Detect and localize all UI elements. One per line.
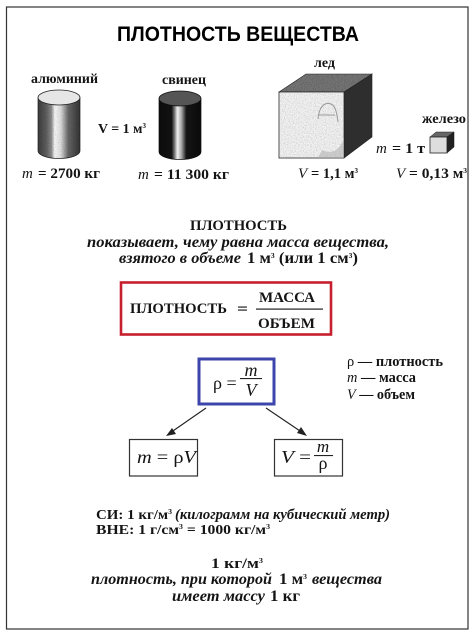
units text: 3 xyxy=(168,508,173,516)
callout: volume formula xyxy=(274,437,342,476)
panel: iron cube: V xyxy=(396,166,407,182)
volume label: 3 xyxy=(143,122,146,130)
legend: V — объем xyxy=(347,387,415,403)
callout: density formula: V xyxy=(246,380,258,400)
unit definition text: вещества xyxy=(312,571,382,588)
volume label: V = 1 м xyxy=(98,122,143,137)
definition text: 1 м xyxy=(247,250,269,267)
definition text: 3 xyxy=(271,252,275,260)
callout: word formula: ОБЪЕМ xyxy=(258,316,315,332)
arrow: to volume formula xyxy=(266,408,307,436)
panel: iron cube: = 1 т xyxy=(392,141,425,157)
panel: ice cube xyxy=(279,56,372,182)
callout: word formula: ПЛОТНОСТЬ xyxy=(130,301,227,317)
panel: aluminium cylinder: = 2700 кг xyxy=(38,166,100,182)
definition text: 3 xyxy=(349,252,353,260)
callout: volume formula: ρ xyxy=(319,453,328,473)
panel: ice cube: лед xyxy=(314,56,335,71)
definition text: показывает, чему равна масса вещества, xyxy=(87,234,389,251)
panel: iron cube xyxy=(376,112,468,182)
callout: mass formula xyxy=(130,440,198,476)
arrow: to mass formula xyxy=(166,408,206,436)
units text: = 1000 кг/м xyxy=(183,523,267,538)
unit definition text: плотность, при которой xyxy=(91,571,272,588)
panel: aluminium cylinder xyxy=(22,72,100,182)
callout: word formula: = xyxy=(237,301,248,318)
definition text: ПЛОТНОСТЬ xyxy=(190,218,287,234)
callout: density formula xyxy=(199,359,274,404)
unit definition text: имеет массу xyxy=(172,588,265,605)
unit definition text: 1 м xyxy=(279,571,301,588)
units text: 3 xyxy=(266,523,271,531)
unit definition text: 3 xyxy=(259,557,264,565)
panel: lead cylinder xyxy=(138,73,229,183)
units text: (килограмм на кубический метр) xyxy=(175,507,390,523)
legend xyxy=(347,354,443,403)
legend: ρ — плотность xyxy=(347,354,443,370)
unit definition text: 1 кг xyxy=(270,588,300,605)
panel: lead cylinder: = 11 300 кг xyxy=(154,167,229,183)
units text: СИ: 1 кг/м xyxy=(96,507,161,522)
callout: volume formula: m xyxy=(317,437,329,456)
legend: m — масса xyxy=(347,370,417,386)
panel: lead cylinder: m xyxy=(138,167,149,183)
panel: iron cube: m xyxy=(376,141,387,157)
definition text: взятого в объеме xyxy=(119,250,241,267)
definition text: (или 1 см xyxy=(275,250,349,267)
panel: iron cube: = 0,13 м xyxy=(409,166,460,182)
panel: ice cube: = 1,1 м xyxy=(311,166,355,182)
callout: mass formula: m = ρV xyxy=(137,447,198,467)
units text: 3 xyxy=(179,523,184,531)
title: ПЛОТНОСТЬ ВЕЩЕСТВА xyxy=(117,23,359,46)
definition text: ) xyxy=(352,250,358,267)
unit definition text: 1 кг/м xyxy=(211,556,252,572)
units text: ВНЕ: 1 г/см xyxy=(96,523,170,538)
units text xyxy=(96,507,390,538)
callout: volume formula: V = xyxy=(281,447,311,467)
unit definition text xyxy=(91,556,382,605)
panel: iron cube: 3 xyxy=(463,167,468,175)
callout: density formula: m xyxy=(244,360,258,380)
panel: iron cube: железо xyxy=(422,112,466,127)
panel: lead cylinder: свинец xyxy=(162,73,206,88)
panel: aluminium cylinder: m xyxy=(22,166,33,182)
definition text xyxy=(87,218,389,267)
unit definition text: 3 xyxy=(303,573,308,581)
callout: density formula: ρ = xyxy=(213,373,237,393)
callout: word formula: МАССА xyxy=(259,290,315,306)
callout: word formula xyxy=(121,282,331,334)
panel: aluminium cylinder: алюминий xyxy=(31,72,98,87)
panel: ice cube: 3 xyxy=(355,167,358,175)
panel: ice cube: V xyxy=(298,166,309,182)
